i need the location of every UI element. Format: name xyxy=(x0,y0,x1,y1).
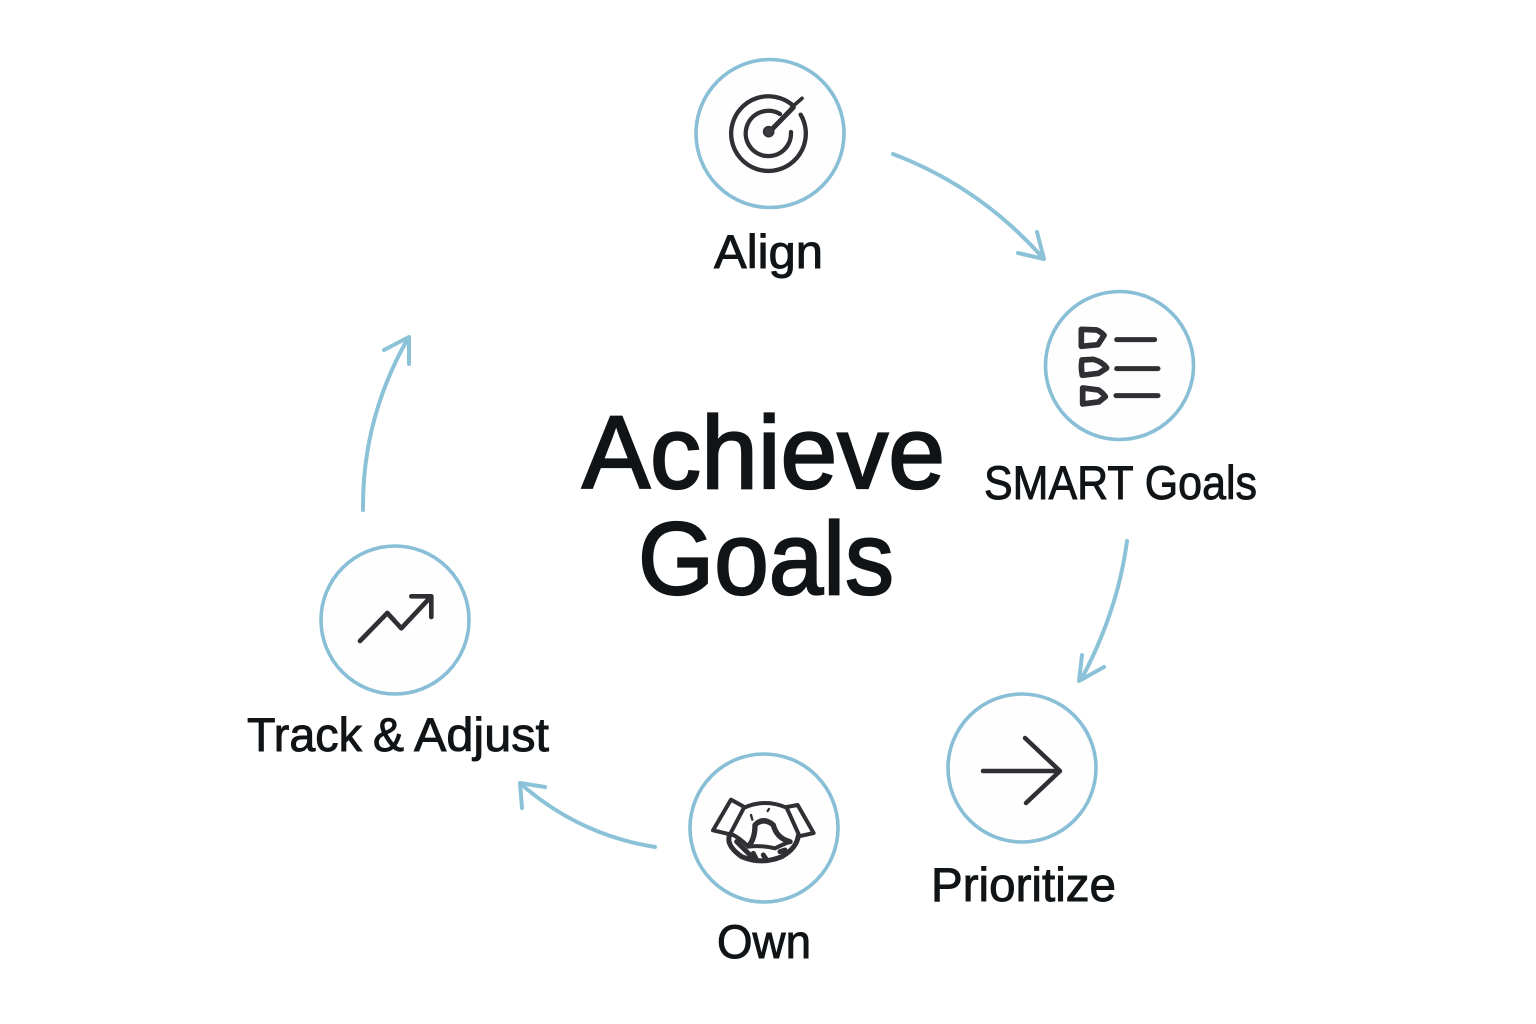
circle: Prioritize xyxy=(948,694,1096,842)
icon: target with dart xyxy=(731,96,806,171)
label: Prioritize: Prioritize xyxy=(931,858,1116,911)
circle: Align xyxy=(696,60,844,208)
step: Prioritize xyxy=(931,694,1116,911)
icon: rising trend arrow xyxy=(360,596,431,641)
arrow: SMART Goals to Prioritize xyxy=(1079,541,1127,681)
label: SMART Goals: SMART Goals xyxy=(984,456,1257,509)
icon: handshake xyxy=(713,800,814,861)
circle: Track & Adjust xyxy=(321,546,469,694)
label: Track & Adjust: Track xyxy=(247,708,362,761)
central title: Achieve Goals: Achieve xyxy=(582,395,945,510)
step: Track & Adjust xyxy=(247,546,549,761)
circle: Own xyxy=(690,754,838,902)
icon: checklist xyxy=(1081,329,1158,404)
central title: Achieve Goals: Goals xyxy=(638,501,894,616)
step: SMART Goals xyxy=(984,292,1257,509)
step: Align xyxy=(696,60,844,278)
arrow: Track & Adjust to Align xyxy=(363,337,409,510)
label: Track & Adjust xyxy=(247,708,549,761)
label: Align: Align xyxy=(714,225,823,278)
central title: Achieve Goals xyxy=(582,395,945,616)
label: Track & Adjust: Adjust xyxy=(414,708,549,761)
label: Track & Adjust: & xyxy=(373,708,404,761)
circle: SMART Goals xyxy=(1046,292,1194,440)
icon: right arrow xyxy=(983,738,1060,803)
arrow: Align to SMART Goals xyxy=(893,154,1044,259)
arrow: Own to Track & Adjust xyxy=(520,783,655,847)
label: Own: Own xyxy=(717,915,811,968)
step: Own xyxy=(690,754,838,968)
